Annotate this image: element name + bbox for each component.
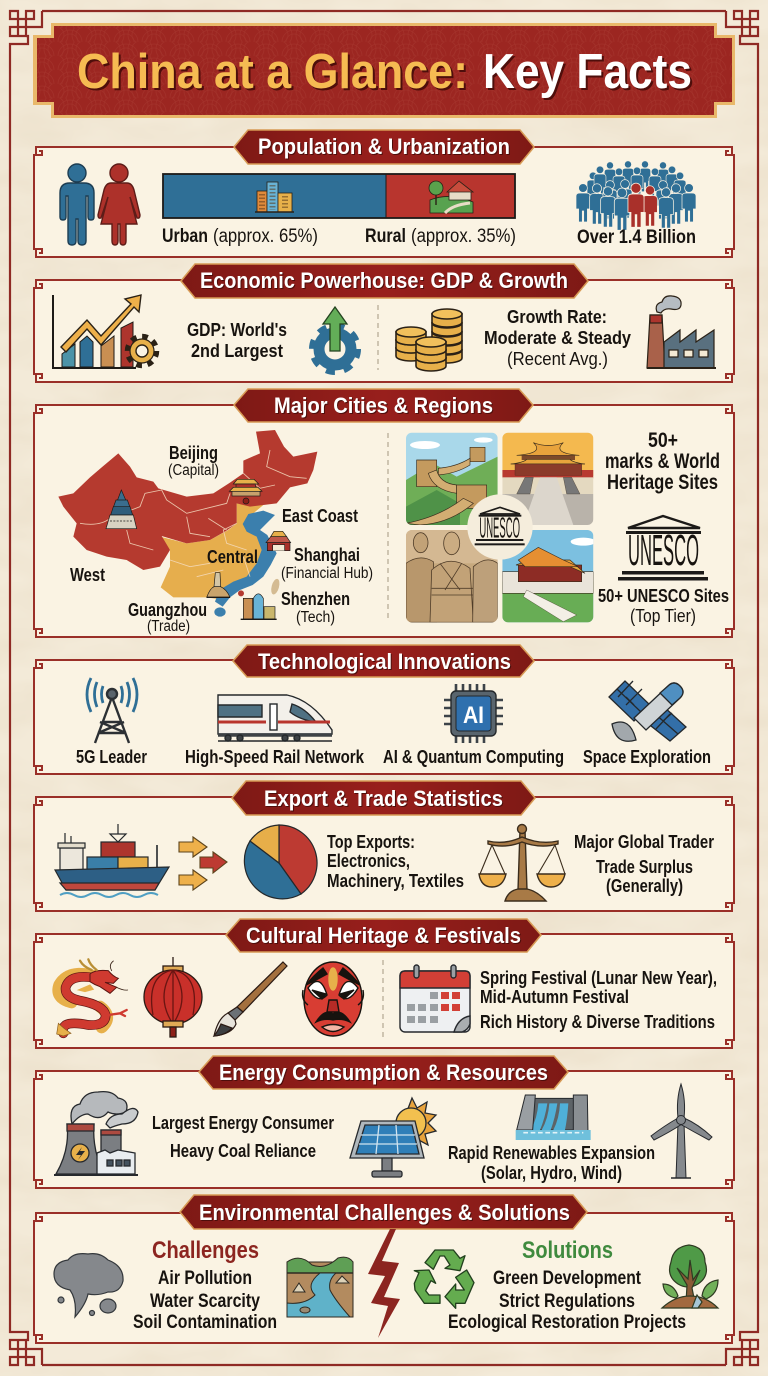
text: challenges [133,1237,277,1333]
text: growth rate: (Recent Avg.) [507,349,608,369]
text: solutions: Green Development [493,1268,642,1289]
map labels: Guangzhou [128,600,207,620]
text: solutions: Ecological Restoration Projects [448,1312,686,1333]
label: rural: (approx. 35%) [411,226,516,247]
text: festivals: Spring Festival (Lunar New Year), [480,968,717,988]
heading: economy: Economic Powerhouse: GDP & Growth [200,268,568,293]
tech labels [76,747,711,767]
text: GDP: 2nd Largest [191,341,283,361]
icon: Shanghai gate [266,531,291,551]
heading: population [234,130,534,164]
icon: calendar [400,965,470,1032]
text: energy consumer: Heavy Coal Reliance [170,1141,316,1161]
text: UNESCO sites [598,586,729,626]
icon: wind turbine [651,1084,712,1178]
tech labels: Space Exploration [583,747,711,767]
landmark tile collage: UNESCO [479,513,520,545]
icon: tree sapling [662,1245,718,1308]
tech labels: High-Speed Rail Network [185,747,365,767]
icon: western pagoda [106,490,137,529]
text: landmarks count: Heritage Sites [607,471,718,494]
heading: culture: Cultural Heritage & Festivals [246,923,521,948]
icon: lightning bolt divider [368,1229,400,1338]
icon: 5G tower [87,678,137,743]
icon: dragon [57,959,128,1036]
panel: technological innovations [34,645,734,774]
map labels: Central [207,547,258,567]
label: over 1.4 billion: Over 1.4 Billion [577,227,696,248]
icon: coal power plant [54,1092,138,1175]
icon: satellite [609,681,686,741]
text: landmarks count: marks & World [605,450,720,473]
text: growth rate: Moderate & Steady [484,328,631,348]
icon: city [255,182,294,212]
map labels [70,443,373,635]
text: renewables: (Solar, Hydro, Wind) [481,1163,622,1183]
heading: population: Population & Urbanization [258,134,510,159]
icon: crowd [576,161,696,230]
heading: tech: Technological Innovations [258,649,511,674]
tech labels: 5G Leader [76,747,147,767]
panel: economic powerhouse [34,264,734,382]
heading: energy [199,1056,568,1089]
map region: blue coast [215,511,277,607]
bar chart: urban vs rural [163,174,515,218]
icon: cargo ship [55,824,169,897]
label: urban [162,226,318,247]
text: challenges: Air Pollution [158,1268,252,1289]
icon: coin stacks [396,309,462,371]
text: top exports: Electronics, [327,851,410,871]
label: urban: (approx. 65%) [213,226,318,247]
panel: environment [34,1195,734,1343]
text: festivals: Rich History & Diverse Traditions [480,1012,715,1032]
pie chart: exports [244,825,317,899]
map labels: West [70,565,105,585]
heading: trade: Export & Trade Statistics [264,786,503,811]
icon: arrows [179,837,227,890]
map region: yellow central [160,503,272,599]
text: solutions [448,1237,686,1333]
icon: gear with up arrow [313,307,357,371]
panel: export and trade [34,781,734,911]
map labels: (Capital) [168,462,219,479]
text: festivals [480,968,717,1032]
icon: Beijing gate [229,479,262,504]
icon: balance scale [479,824,565,901]
text: renewables: Rapid Renewables Expansion [448,1143,655,1163]
text: landmarks count: 50+ [648,429,678,452]
text: challenges: Challenges [152,1237,259,1264]
map labels: Beijing [169,443,218,463]
heading: environment: Environmental Challenges & Solutions [199,1200,570,1225]
panel: population and urbanization [34,130,734,257]
icon: woman [98,164,140,245]
map labels: Shenzhen [281,589,350,609]
icon: factory [647,296,716,368]
icon: village [429,181,473,213]
icon: paint brush [214,962,287,1036]
text: global trader: (Generally) [606,876,683,896]
text: GDP [187,320,287,361]
text: challenges: Soil Contamination [133,1312,277,1333]
icon: hydro dam [516,1095,591,1140]
icon: growth chart with gear [53,295,156,368]
panel: cultural heritage [34,919,734,1048]
panel: energy [34,1056,734,1188]
text: solutions: Solutions [522,1237,613,1264]
icon: dry river [287,1257,353,1317]
text: landmarks count [605,429,720,494]
title text [77,45,692,99]
text: global trader: Trade Surplus [596,857,693,877]
icon: solar panel [350,1098,436,1177]
text: growth rate [484,307,631,369]
map labels: (Trade) [147,618,190,635]
text: global trader: Major Global Trader [574,832,714,852]
map labels: Shanghai [294,545,360,565]
icon: Guangzhou tower [207,573,230,597]
icon: high-speed train [218,695,332,741]
map labels: East Coast [282,506,358,526]
text: top exports [327,832,464,891]
heading: environment [180,1195,587,1229]
label: urban: Urban [162,226,208,247]
label: rural: Rural [365,226,406,247]
text: challenges: Water Scarcity [150,1291,260,1312]
text: renewables [448,1143,655,1183]
title banner [33,23,735,118]
icon: opera mask [303,962,363,1036]
text: top exports: Machinery, Textiles [327,871,464,891]
title text: China at a Glance: [77,45,468,99]
text: growth rate: Growth Rate: [507,307,607,327]
icon: man [60,164,94,245]
map of China [58,430,317,619]
icon: Shenzhen skyline [241,594,277,619]
tech labels: AI & Quantum Computing [383,747,564,767]
heading: energy: Energy Consumption & Resources [219,1060,548,1085]
icon: AI chip: AI [463,702,484,729]
text: energy consumer: Largest Energy Consumer [152,1113,334,1133]
text: festivals: Mid-Autumn Festival [480,987,629,1007]
map labels: (Tech) [296,609,335,626]
icon: recycle arrows [414,1250,474,1308]
landmark tile collage [406,433,596,622]
title text: Key Facts [483,45,692,99]
heading: trade [232,781,535,815]
text: solutions: Strict Regulations [499,1291,635,1312]
heading: cities [234,389,533,422]
tile: Great Wall [406,433,498,525]
heading: economy [181,264,588,298]
badge: UNESCO in circle [467,494,533,560]
panel: major cities and regions [34,389,734,637]
heading: cities: Major Cities & Regions [274,393,493,418]
text: top exports: Top Exports: [327,832,415,852]
text: UNESCO sites: 50+ UNESCO Sites [598,586,729,606]
tile: Potala palace [502,530,596,622]
text: global trader [574,832,714,896]
tile: Terracotta warriors [406,530,498,622]
text: GDP: GDP: World's [187,320,287,340]
icon: UNESCO logo [618,516,708,580]
map labels: (Financial Hub) [281,565,373,582]
text: energy consumer [152,1113,334,1161]
icon: AI chip [444,684,503,743]
icon: lantern [144,957,202,1037]
label: rural [365,226,516,247]
tile: Forbidden City [502,433,593,525]
text: UNESCO sites: (Top Tier) [630,606,696,626]
map region: red north and west [58,430,317,570]
icon: pollution cloud [54,1254,123,1317]
